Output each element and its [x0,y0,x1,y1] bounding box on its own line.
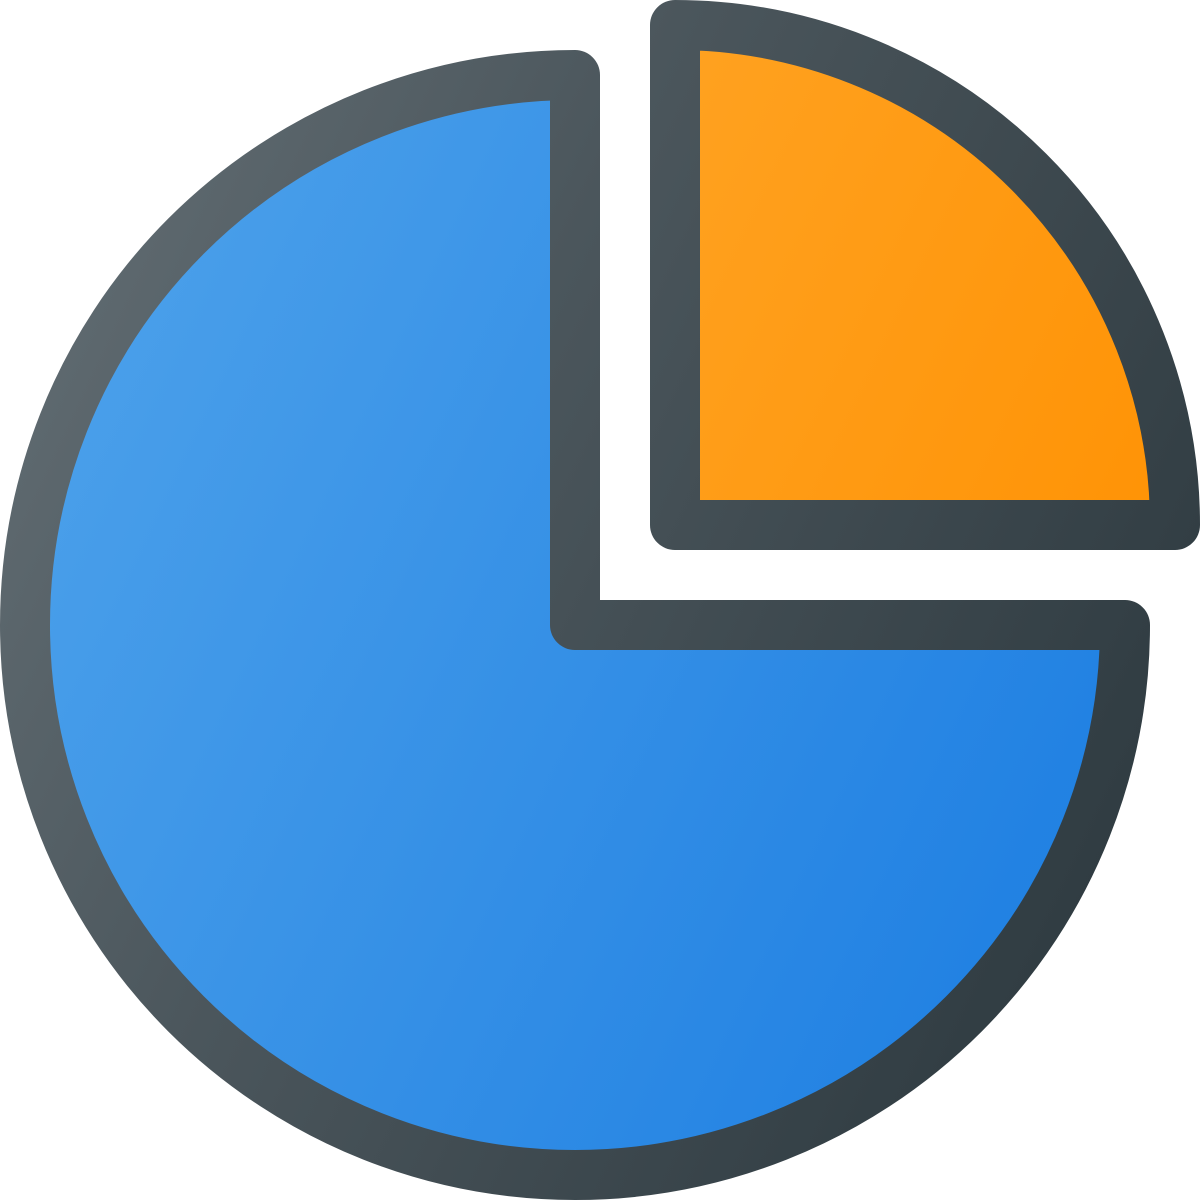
small orange pie segment [675,25,1175,525]
